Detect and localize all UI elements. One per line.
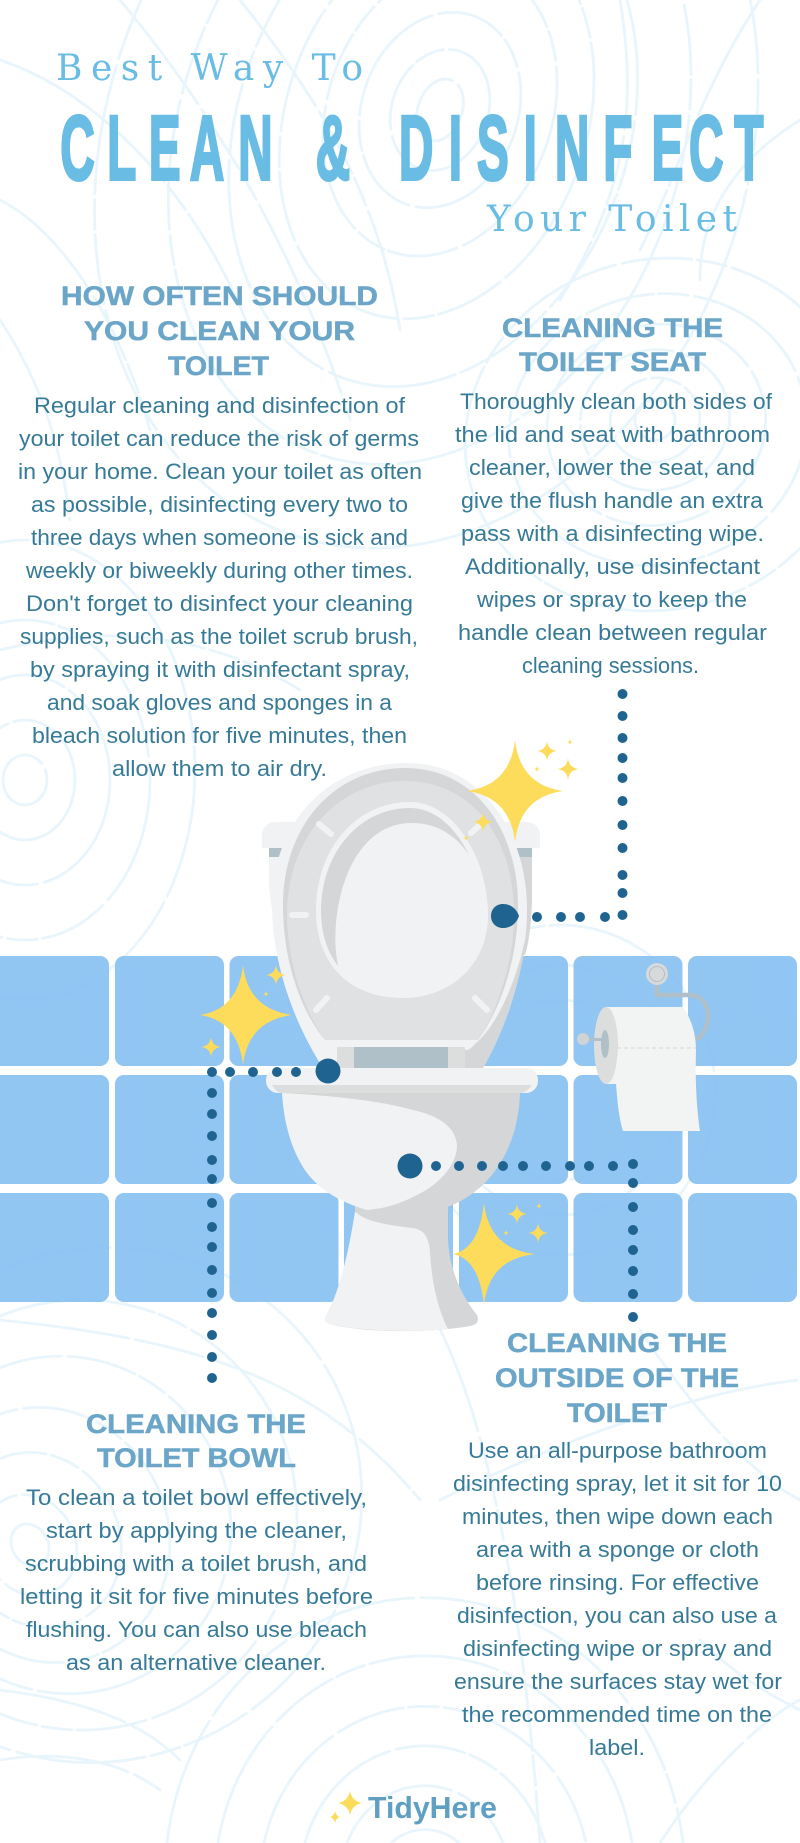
- body text: Thoroughly clean both sides of: [460, 389, 773, 414]
- heading: OUTSIDE OF THE: [495, 1363, 739, 1393]
- heading: [495, 1328, 739, 1428]
- body text: disinfecting spray, let it sit for 10: [453, 1471, 782, 1496]
- heading: TOILET SEAT: [519, 347, 706, 377]
- icon: toilet paper roll: [577, 963, 708, 1131]
- body text: start by applying the cleaner,: [46, 1518, 347, 1543]
- panel: cleaning the toilet seat: [455, 313, 773, 678]
- title: [56, 48, 763, 240]
- body text: handle clean between regular: [458, 620, 768, 645]
- body text: [453, 1438, 783, 1760]
- body text: cleaner, lower the seat, and: [469, 455, 755, 480]
- body text: bleach solution for five minutes, then: [32, 723, 407, 748]
- body text: as possible, disinfecting every two to: [31, 492, 408, 517]
- body text: Regular cleaning and disinfection of: [34, 393, 406, 418]
- heading: TOILET: [567, 1398, 667, 1428]
- toilet lid: [272, 763, 527, 1068]
- panel: cleaning the outside of the toilet: [453, 1328, 783, 1760]
- body text: by spraying it with disinfectant spray,: [30, 657, 410, 682]
- heading: YOU CLEAN YOUR: [84, 316, 355, 346]
- sparkle: top right: [463, 738, 579, 842]
- body text: supplies, such as the toilet scrub brush,: [20, 624, 418, 649]
- title line: Your Toilet: Your Toilet: [486, 199, 738, 240]
- toilet tank: [262, 822, 540, 955]
- heading: [61, 281, 378, 381]
- body text: cleaning sessions.: [522, 653, 699, 678]
- heading: HOW OFTEN SHOULD: [61, 281, 378, 311]
- body text: as an alternative cleaner.: [66, 1650, 326, 1675]
- body text: To clean a toilet bowl effectively,: [26, 1485, 367, 1510]
- body text: [455, 389, 773, 678]
- wall tiles: [0, 956, 797, 1302]
- body text: scrubbing with a toilet brush, and: [25, 1551, 367, 1576]
- body text: your toilet can reduce the risk of germs: [19, 426, 419, 451]
- body text: area with a sponge or cloth: [476, 1537, 759, 1562]
- heading: [86, 1409, 306, 1473]
- body text: wipes or spray to keep the: [476, 587, 747, 612]
- body text: weekly or biweekly during other times.: [25, 558, 413, 583]
- connector: outside of the toilet: [398, 1154, 638, 1322]
- toilet seat rim: [266, 1068, 538, 1093]
- icon: toilet: [262, 763, 540, 1331]
- title line: Best Way To: Best Way To: [56, 48, 363, 89]
- body text: minutes, then wipe down each: [462, 1504, 773, 1529]
- body text: three days when someone is sick and: [31, 525, 408, 550]
- body text: in your home. Clean your toilet as often: [18, 459, 422, 484]
- body text: the lid and seat with bathroom: [455, 422, 770, 447]
- body text: allow them to air dry.: [112, 756, 327, 781]
- connector: toilet seat: [491, 689, 628, 928]
- sparkles: [200, 738, 579, 1305]
- panel: how often should you clean your toilet: [18, 281, 422, 781]
- heading: TOILET: [168, 351, 269, 381]
- toilet hinge: [337, 1047, 465, 1068]
- body text: [20, 1485, 373, 1675]
- body text: disinfection, you can also use a: [457, 1603, 777, 1628]
- body text: give the flush handle an extra: [461, 488, 763, 513]
- sparkle: bottom: [453, 1202, 548, 1305]
- body text: Use an all-purpose bathroom: [468, 1438, 767, 1463]
- body text: letting it sit for five minutes before: [20, 1584, 373, 1609]
- dotted connectors: [207, 689, 638, 1383]
- body text: disinfecting wipe or spray and: [463, 1636, 772, 1661]
- heading: TOILET BOWL: [97, 1443, 296, 1473]
- body text: the recommended time on the: [462, 1702, 772, 1727]
- icon: logo sparkles: [330, 1791, 362, 1823]
- title line: Clean & Disinfect: CLEAN & DISINFECT: [60, 97, 763, 200]
- body text: label.: [589, 1735, 645, 1760]
- body text: before rinsing. For effective: [476, 1570, 759, 1595]
- panel: cleaning the toilet bowl: [20, 1409, 373, 1675]
- body text: pass with a disinfecting wipe.: [461, 521, 764, 546]
- body text: flushing. You can also use bleach: [26, 1617, 367, 1642]
- heading: [502, 313, 723, 377]
- body text: [18, 393, 422, 781]
- connector: toilet bowl: [207, 1058, 340, 1383]
- logo: TidyHere: TidyHere: [368, 1790, 497, 1825]
- body text: and soak gloves and sponges in a: [47, 690, 392, 715]
- heading: CLEANING THE: [86, 1409, 306, 1439]
- sparkle: left: [200, 965, 292, 1065]
- heading: CLEANING THE: [502, 313, 723, 343]
- toilet bowl: [282, 1093, 520, 1331]
- body text: Additionally, use disinfectant: [465, 554, 761, 579]
- body text: ensure the surfaces stay wet for: [454, 1669, 783, 1694]
- body text: Don't forget to disinfect your cleaning: [26, 591, 413, 616]
- heading: CLEANING THE: [507, 1328, 727, 1358]
